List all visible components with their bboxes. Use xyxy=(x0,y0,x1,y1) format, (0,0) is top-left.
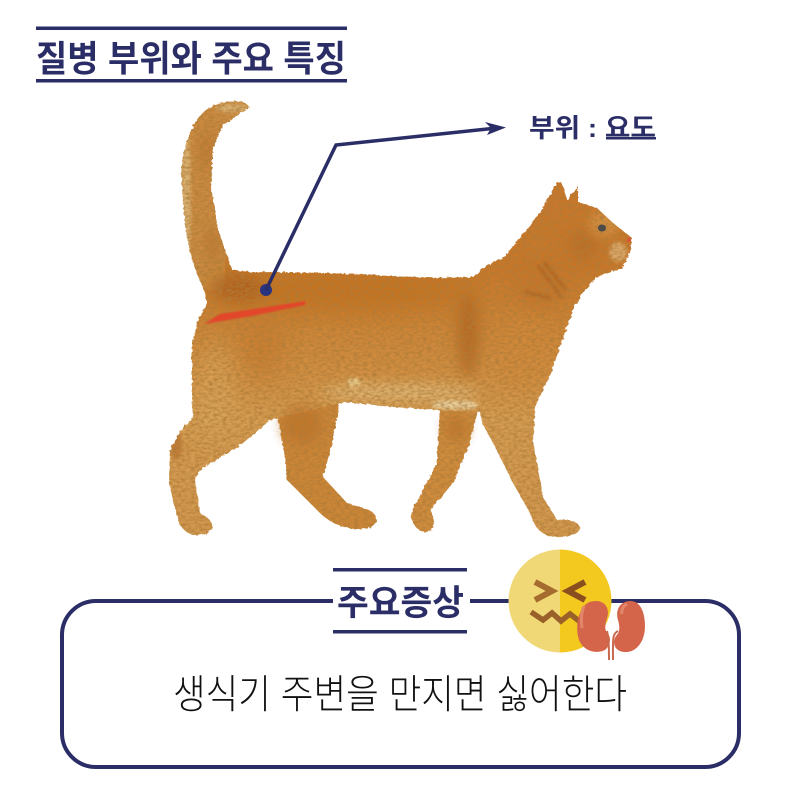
icon: kidneys xyxy=(577,601,645,660)
far hind leg xyxy=(275,400,376,529)
illustration: walking cat xyxy=(169,96,632,537)
far front leg stripes xyxy=(445,415,467,441)
cat nose xyxy=(627,238,631,242)
cat body silhouette xyxy=(169,101,632,537)
cat eye xyxy=(598,224,606,232)
marker: urethra red line xyxy=(204,301,306,324)
far front leg xyxy=(411,405,478,532)
panel frame xyxy=(62,601,739,767)
label: 부위 : 요도: 부위 : 요도 xyxy=(529,113,656,143)
heading: 주요증상: 주요증상 xyxy=(337,584,464,623)
arrow: pointer from urethra to label xyxy=(260,122,506,296)
symptom text: 생식기 주변을 만지면 싫어한다 xyxy=(173,673,627,717)
panel: main symptoms xyxy=(62,568,739,767)
title: 질병 부위와 주요 특징: 질병 부위와 주요 특징 xyxy=(36,38,346,79)
far hind leg shading xyxy=(282,405,322,445)
fur shading xyxy=(170,96,627,460)
heading: 주요증상 xyxy=(333,568,467,634)
icon: pained face emoji xyxy=(509,550,612,652)
